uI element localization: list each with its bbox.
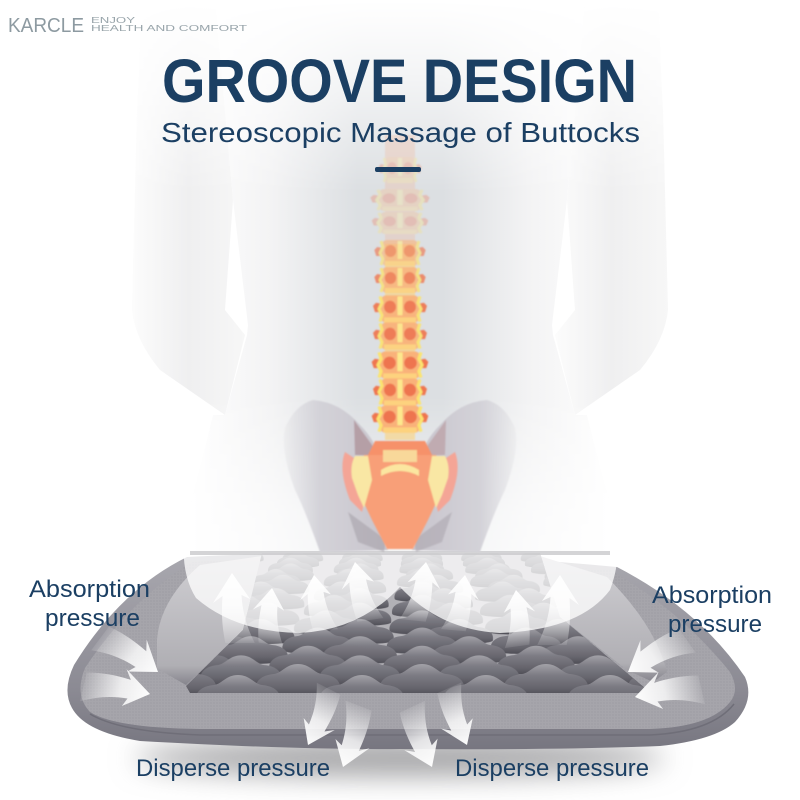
sacrum [342, 441, 458, 549]
right arm [577, 111, 668, 410]
cushion outer rim [67, 553, 748, 749]
upper faded vertebrae [370, 135, 430, 240]
cushion top surface [81, 558, 735, 729]
downward arrows [290, 683, 350, 753]
logo: KARCLE [8, 15, 84, 37]
lumbar glow column [385, 244, 415, 440]
seat cushion [67, 555, 748, 750]
buttocks veil [184, 415, 618, 633]
lumbar vertebrae [374, 240, 426, 266]
label: absorption pressure left: pressure [45, 605, 140, 632]
label: absorption pressure right: Absorption [652, 582, 772, 609]
right hip bone [412, 400, 516, 552]
label: disperse pressure left: Disperse pressure [136, 755, 330, 782]
upward arrows [213, 573, 255, 643]
cushion back edge seen through body [190, 551, 610, 555]
wave massage grooves [186, 555, 644, 693]
logo: ENJOY [91, 16, 136, 25]
right bolster [540, 556, 667, 682]
translucent body silhouette [154, 55, 668, 633]
central groove well [186, 553, 645, 693]
logo: HEALTH AND COMFORT [91, 24, 247, 33]
left bolster [157, 556, 262, 685]
side arrows [91, 617, 169, 690]
left hip bone [284, 400, 388, 552]
pelvis [284, 400, 516, 552]
label: disperse pressure right: Disperse pressure [455, 755, 649, 782]
label: absorption pressure right: pressure [668, 611, 762, 638]
title divider [375, 167, 421, 172]
cushion stitching [90, 704, 734, 735]
spine [342, 135, 458, 549]
pressure arrows [80, 559, 705, 775]
subtitle: Stereoscopic Massage of Buttocks [161, 117, 640, 148]
ground shadow [135, 740, 665, 776]
title: GROOVE DESIGN [162, 47, 637, 115]
label: absorption pressure left: Absorption [29, 576, 150, 603]
logo [8, 15, 247, 37]
left arm [154, 111, 244, 414]
torso [243, 55, 556, 551]
